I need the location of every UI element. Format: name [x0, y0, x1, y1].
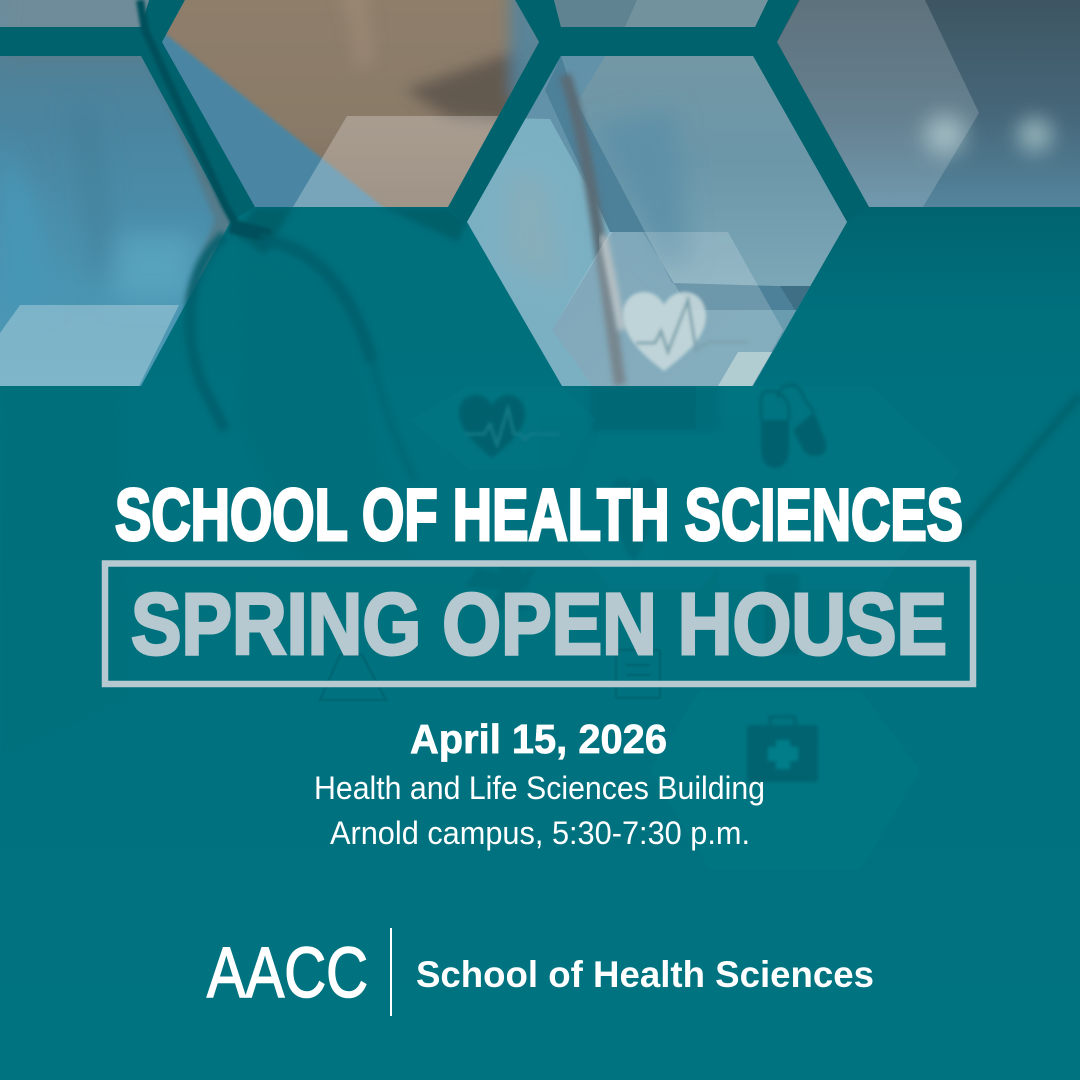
icon: faint clipboard: [616, 650, 660, 698]
icon: faint lab flask: [320, 655, 386, 700]
photo large hexagon: lab coat: [460, 0, 860, 400]
strap: [565, 75, 620, 385]
bright small hexagon: [718, 352, 772, 386]
light hexagon on shirt: [0, 305, 179, 386]
dark tube along hexagon edge: [140, 0, 270, 236]
logo wordmark: AACC: [207, 934, 368, 1013]
faint hexagon tiles: [410, 386, 960, 870]
light hexagon on neck: [293, 116, 500, 207]
shaded area right of large hexagon: [790, 207, 1080, 310]
AACC logo lockup: [207, 928, 874, 1016]
dark hexagon band at top: [0, 0, 1080, 222]
faint medical icons behind title: [465, 478, 799, 654]
event details: [314, 716, 765, 851]
stethoscope loop: [190, 235, 415, 480]
icon: white heart with pulse: [623, 292, 748, 371]
diagonal dark band: [545, 56, 817, 310]
faint tinted figure below photo: [0, 207, 1080, 760]
photo center: neck and scrubs collar: [162, 0, 539, 207]
photo top right: blurred room: [770, 0, 1080, 220]
icon: dark heart with pulse: [459, 395, 560, 458]
event date: April 15, 2026: [410, 716, 667, 762]
icon: medicine capsules: [761, 385, 826, 468]
event building: Health and Life Sciences Building: [314, 770, 765, 806]
logo divider: [390, 928, 392, 1016]
upper coat panel: [580, 56, 847, 286]
icon: first aid kit: [747, 717, 818, 782]
event campus and time: Arnold campus, 5:30-7:30 p.m.: [330, 815, 750, 851]
logo school name: School of Health Sciences: [416, 954, 874, 995]
light hexagon lower: [552, 232, 783, 386]
boxed heading: Spring Open House: SPRING OPEN HOUSE: [131, 576, 947, 673]
left sleeve panel: [467, 118, 612, 386]
photo left: scrubs shirt: [0, 0, 240, 390]
